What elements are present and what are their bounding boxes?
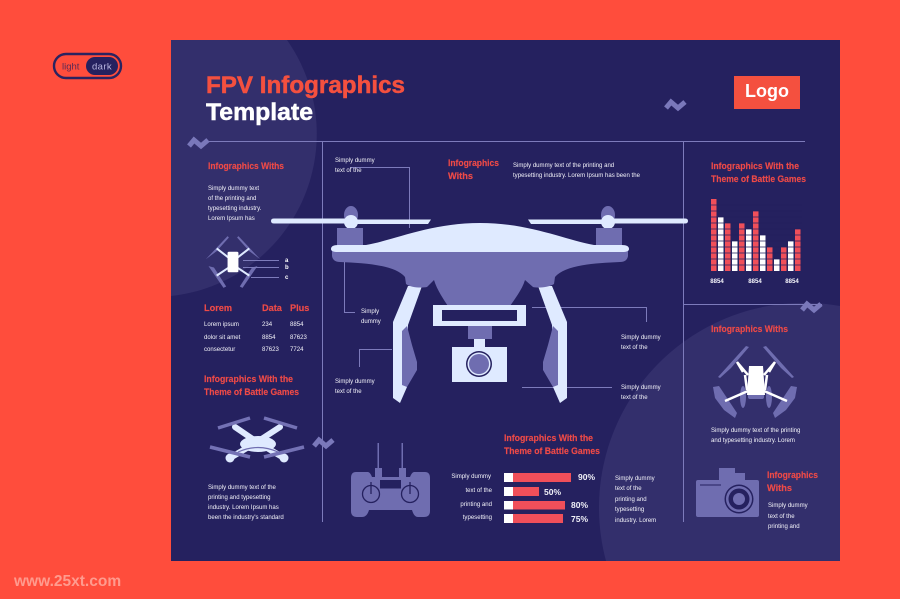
drone propellers and motors [271, 206, 688, 246]
callout texts around drone [335, 158, 662, 401]
callout texts around drone: text of the [621, 345, 648, 351]
table: 8854 [262, 335, 276, 341]
camera [452, 347, 507, 382]
text block: top centre: typesetting industry. Lorem Ipsum has been the [513, 173, 641, 179]
heading: left middle: Infographics With the [204, 374, 293, 384]
zigzag markers [189, 102, 821, 446]
chart: horizontal progress bars [451, 472, 595, 524]
chart: horizontal progress bars: 50% [544, 487, 561, 497]
text block: right of progress chart: industry. Lorem [615, 518, 656, 524]
heading: left middle: Theme of Battle Games [204, 387, 299, 397]
chart: stacked bar chart [710, 161, 806, 285]
text block: left top: Lorem Ipsum has [208, 216, 255, 222]
icon: small top-view drone with labels: b [285, 265, 289, 271]
toggle: light and dark: dark [92, 62, 112, 72]
callout texts around drone: Simply dummy [335, 158, 376, 164]
text block: right of progress chart: Simply dummy [615, 476, 656, 482]
text block: top centre: Infographics [448, 158, 499, 168]
text block: left bottom: industry. Lorem Ipsum has [208, 505, 279, 511]
drone legs [393, 286, 567, 403]
icon: small top-view drone with labels: c [285, 275, 289, 281]
watermark: www.25xt.com [13, 573, 121, 590]
icon: quadcopter angled view [210, 418, 304, 462]
text block: left bottom: Simply dummy text of the [208, 485, 277, 491]
text block: left top: of the printing and [208, 196, 256, 202]
table: 87623 [262, 347, 279, 353]
callout texts around drone: text of the [335, 168, 362, 174]
heading: progress chart [504, 433, 600, 456]
logo: Logo [745, 81, 789, 101]
text block: top centre: Withs [448, 171, 473, 181]
icon: camera [696, 468, 759, 517]
table: Lorem [204, 303, 232, 313]
heading: progress chart: Infographics With the [504, 433, 593, 443]
chart: stacked bar chart: Theme of Battle Games [711, 174, 806, 184]
chart: horizontal progress bars: printing and [460, 502, 492, 508]
callout texts around drone: Simply dummy [621, 335, 662, 341]
table: 8854 [290, 322, 304, 328]
text block: right of progress chart: typesetting [615, 507, 644, 513]
text block: right middle: and typesetting industry. Lorem [711, 438, 795, 444]
text block: top centre [448, 158, 641, 181]
text block: left top: Infographics Withs [208, 161, 284, 171]
callout texts around drone: Simply dummy [335, 379, 376, 385]
table: 234 [262, 322, 273, 328]
text block: bottom right: Infographics [767, 470, 818, 480]
callout texts around drone: text of the [335, 389, 362, 395]
panel: main background [171, 40, 840, 561]
text block: bottom right: Withs [767, 483, 792, 493]
text block: bottom right: Simply dummy [768, 503, 809, 509]
title [206, 72, 405, 126]
table: Plus [290, 303, 309, 313]
chart: horizontal progress bars: 80% [571, 500, 588, 510]
text block: top centre: Simply dummy text of the printing and [513, 163, 614, 169]
text block: left top [208, 161, 284, 222]
toggle: light and dark [54, 54, 121, 78]
table [204, 303, 309, 353]
logo [734, 76, 800, 109]
chart: horizontal progress bars: 75% [571, 514, 588, 524]
drone: main illustration [271, 206, 688, 403]
callout texts around drone: Simply dummy [621, 385, 662, 391]
table: Lorem ipsum [204, 322, 239, 328]
text block: right middle: Simply dummy text of the printing [711, 428, 800, 434]
heading: right middle: Infographics Withs [711, 324, 788, 334]
text block: left bottom: printing and typesetting [208, 495, 271, 501]
table: 87623 [290, 335, 307, 341]
chart: stacked bar chart: Infographics With the [711, 161, 799, 171]
toggle: light and dark: light [62, 62, 80, 72]
chart: horizontal progress bars: text of the [465, 488, 493, 494]
text block: bottom right: printing and [768, 524, 800, 530]
title: FPV Infographics [206, 72, 405, 99]
text block: bottom right [767, 470, 818, 530]
grid lines [205, 141, 822, 522]
chart: stacked bar chart: 8854 [710, 279, 724, 285]
text block: right of progress chart: printing and [615, 497, 647, 503]
text block: right of progress chart: text of the [615, 486, 642, 492]
drone body [331, 223, 629, 306]
icon: large top-view drone [713, 346, 797, 418]
icon: remote controller [351, 443, 430, 517]
leader lines [344, 168, 646, 388]
title: Template [206, 99, 313, 126]
table: 7724 [290, 347, 304, 353]
chart: horizontal progress bars: typesetting [463, 515, 492, 521]
heading: progress chart: Theme of Battle Games [504, 446, 600, 456]
chart: horizontal progress bars: Simply dummy [451, 474, 492, 480]
chart: horizontal progress bars: 90% [578, 472, 595, 482]
text block: left top: typesetting industry. [208, 206, 262, 212]
callout texts around drone: Simply [361, 309, 380, 315]
table: consectetur [204, 347, 235, 353]
text block: bottom right: text of the [768, 514, 795, 520]
gimbal [433, 305, 526, 347]
text block: left bottom [208, 485, 284, 521]
chart: stacked bar chart: 8854 [785, 279, 799, 285]
text block: right of progress chart [615, 476, 656, 524]
table: Data [262, 303, 283, 313]
icon: small top-view drone with labels: a [285, 258, 289, 264]
icon: small top-view drone with labels [206, 236, 289, 288]
text block: left bottom: been the industry's standard [208, 515, 284, 521]
table: dolor sit amet [204, 335, 241, 341]
callout texts around drone: text of the [621, 395, 648, 401]
callout texts around drone: dummy [361, 319, 382, 325]
text block: left top: Simply dummy text [208, 186, 259, 192]
chart: stacked bar chart: 8854 [748, 279, 762, 285]
text block: right middle [711, 428, 800, 444]
heading: left middle [204, 374, 299, 397]
